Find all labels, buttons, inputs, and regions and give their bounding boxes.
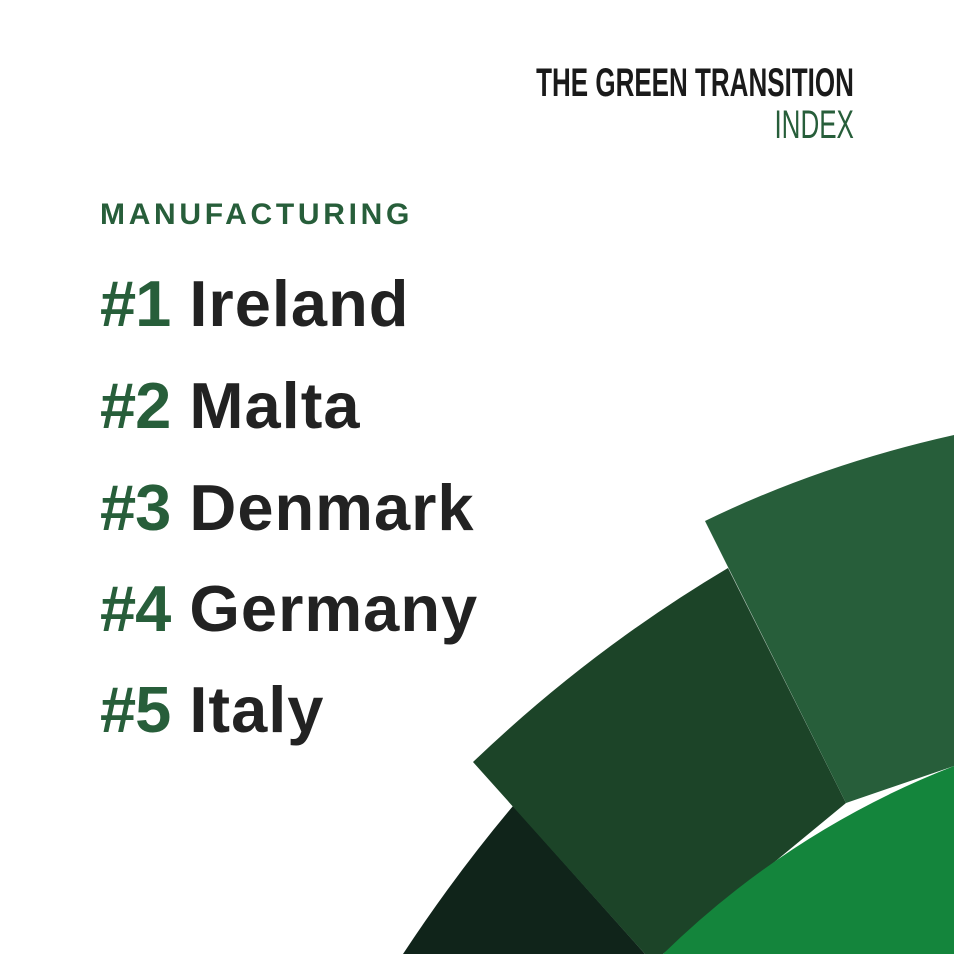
rank 3: #3 Denmark <box>100 471 475 544</box>
title: INDEX <box>775 103 854 147</box>
heading: manufacturing: MANUFACTURING <box>100 198 413 231</box>
segment: dark <box>473 568 846 954</box>
segment: darkest <box>403 806 645 954</box>
ranking list <box>100 267 478 746</box>
rank 5: #5 Italy <box>100 673 324 746</box>
title: THE GREEN TRANSITION <box>536 61 854 105</box>
rank 1: #1 Ireland <box>100 267 410 340</box>
rank 4: #4 Germany <box>100 572 478 645</box>
rank 2: #2 Malta <box>100 369 361 442</box>
segment: mid <box>705 435 954 803</box>
segment: bright green <box>663 766 954 954</box>
title <box>536 61 854 147</box>
